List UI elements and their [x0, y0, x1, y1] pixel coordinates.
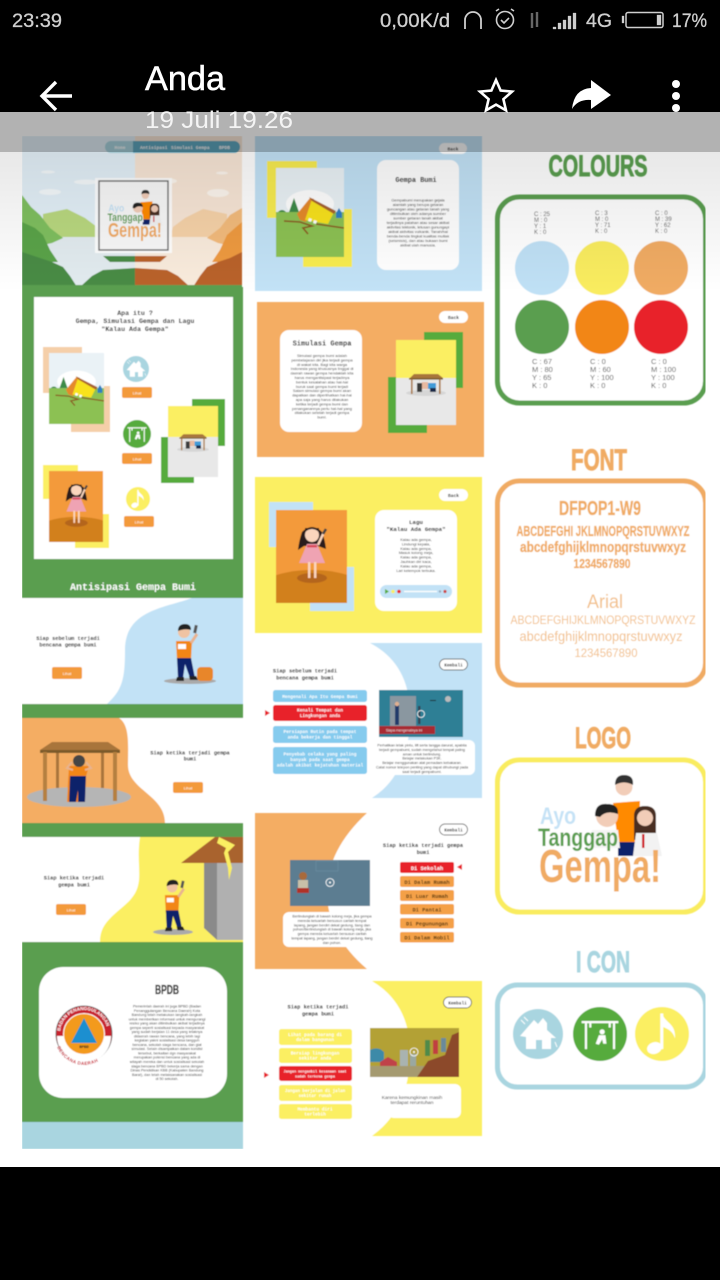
text card: pembelajaran diri jika terjadi gempa	[291, 357, 354, 362]
caption: pohon/Berlindunglah di bawah kolong meja, jika	[293, 928, 372, 932]
button: Lihat	[135, 520, 144, 524]
panel: colours: M : 100	[651, 365, 676, 374]
slide: Siap sebelum terjadi: Siap sebelum terjadi	[273, 668, 337, 674]
text card	[377, 160, 459, 270]
video thumbnail: Siapa mengenalnya ini	[386, 728, 422, 732]
font sample: Arial: 1234567890	[574, 646, 638, 660]
logo card: Ayo	[108, 202, 125, 214]
text card: daerah rawan gempa hendaklah kita	[291, 371, 354, 376]
slide: Siap ketika (sekolah): Siap ketika terjadi gempa	[383, 843, 464, 849]
image	[388, 332, 463, 433]
slide: Siap ketika (sekolah): bumi	[417, 850, 429, 856]
panel: siap ketika (table)	[22, 718, 243, 837]
heading: font: FONT	[571, 444, 627, 477]
font sample: DFPOP: DFPOP1-W9	[559, 498, 641, 520]
text card: ketika terjadi gempa bumi dan	[296, 401, 348, 406]
text card: guncangan atau gelaran tanah yang	[387, 206, 449, 212]
menu list: banyak pada saat gempa	[290, 757, 350, 763]
button	[56, 904, 86, 915]
back button	[439, 143, 467, 154]
caption: terjadi gempabumi, sudah mengetahui tempat paling	[379, 748, 465, 752]
caption: dan pohon.	[323, 941, 341, 945]
BPDB body text: tersebut, berkaitan dgn masyarakat	[138, 1051, 196, 1055]
panel: siap sebelum: Siap sebelum terjadi	[36, 636, 100, 642]
icon: table	[573, 1007, 627, 1061]
mountains right	[135, 208, 242, 287]
button: Lihat	[133, 456, 142, 462]
heading: colours: COLOURS	[548, 150, 648, 183]
text card: bentuk kesalahan atau hal-hal	[296, 379, 348, 384]
kembali button	[440, 659, 468, 670]
font sample: Arial: Arial	[587, 592, 623, 613]
menu list: Lihat pada barang di	[288, 1032, 342, 1038]
video thumbnail	[290, 860, 370, 906]
logo artwork: Ayo	[540, 803, 576, 830]
nav bar: Simulasi Gempa	[171, 145, 210, 151]
caption: lapang, jangan berdiri dekat gedung, tiang dan	[294, 923, 370, 927]
slide: Lagu	[250, 477, 482, 633]
menu list: anda bekerja dan tinggal	[288, 734, 353, 740]
CMYK values: K : 0	[534, 230, 547, 236]
BPDB body text: wilayah mereka dan untuk sosialisasi sekolah	[130, 1060, 204, 1064]
caption: mereda keluarlah bersusun carilah tempat	[298, 919, 366, 923]
menu list: sekitar anda	[299, 1056, 332, 1062]
CMYK values: M : 39	[655, 217, 672, 223]
arrow marker	[264, 1072, 269, 1078]
icon: alarm	[496, 9, 514, 28]
BPDB body text: Penanggulangan Bencana Daerah) Kota	[134, 1009, 201, 1013]
arrow marker	[457, 864, 462, 870]
button: Lihat	[67, 908, 76, 912]
menu heading: Apa itu ?	[117, 310, 153, 317]
CMYK values: C : 25	[534, 212, 551, 218]
menu list: Penyebab celaka yang paling	[284, 752, 357, 758]
menu heading: "Kalau Ada Gempa"	[101, 326, 169, 333]
BPDB body text: resiko yang akan ditimbulkan akibat terjadinya	[129, 1022, 206, 1026]
back button: Back	[447, 146, 459, 152]
panel: BPDB	[22, 941, 244, 1149]
menu heading: Gempa, Simulasi Gempa dan Lagu	[76, 318, 194, 325]
lyric card: Lindungi kepala,	[402, 541, 430, 546]
icon: star	[480, 80, 512, 110]
slide: Siap sebelum terjadi	[255, 643, 482, 798]
panel: icon	[498, 985, 706, 1087]
panel: siap ketika (house)	[22, 837, 243, 942]
font sample: Arial: ABCDEFGHIJKLMNOPQRSTUVWXYZ	[510, 613, 696, 627]
button	[124, 516, 154, 527]
logo card	[95, 178, 172, 253]
text card: Salam simulasi gempa bumi akan	[293, 388, 351, 393]
font sample: DFPOP: 1234567890	[574, 556, 630, 571]
caption: Belajar menggunakan alat pemadam kebakaran.	[382, 761, 462, 765]
panel: siap ketika (house): gempa bumi	[58, 882, 90, 888]
slide: Siap ketika (pantai)	[255, 981, 482, 1136]
font sample: Arial	[510, 592, 696, 660]
slide: Siap ketika (pantai): Siap ketika terjadi	[288, 1004, 348, 1010]
kembali button	[444, 997, 472, 1008]
lyric card: Kalau ada gempa,	[400, 537, 432, 542]
toolbar: title: Anda	[145, 60, 225, 98]
CMYK values: M : 0	[595, 217, 609, 223]
BPDB body text: Barat), dan telah melaksanakan sosialisasi	[132, 1073, 202, 1077]
lyric card: Jauhkan diri kaca,	[400, 559, 432, 564]
caption: saat terjadi gempabumi.	[402, 770, 442, 774]
icon: more	[672, 80, 680, 112]
logo artwork: Tanggap	[538, 824, 618, 852]
button	[52, 667, 82, 679]
panel: siap ketika (table): bumi	[184, 756, 196, 762]
button	[173, 782, 203, 793]
CMYK values	[534, 211, 672, 236]
text card: apa saja yang harus dilakukan	[296, 397, 348, 402]
kembali button: Kembali	[448, 1002, 467, 1006]
text card: Indonesia yang khususnya tinggal di	[291, 366, 353, 371]
menu list: Membantu diri	[297, 1106, 333, 1112]
menu list: Kenali Tempat dan	[297, 708, 343, 714]
BPBD logo: BADAN PENANGGULANGAN	[56, 1006, 110, 1032]
button: Lihat	[63, 671, 72, 676]
mountains left	[22, 195, 135, 287]
arrow marker	[265, 710, 270, 716]
heading: logo: LOGO	[575, 722, 631, 755]
lyric card: "Kalau Ada Gempa"	[386, 526, 446, 533]
lyric card	[375, 510, 457, 611]
icon: battery	[622, 12, 663, 28]
text card: Gempa Bumi	[395, 177, 437, 185]
panel: siap sebelum	[22, 598, 243, 718]
thumbnail: simulasi	[161, 399, 225, 483]
text card: Gempabumi merupakan gejala	[391, 198, 445, 202]
BPDB body text: untuk memberikan informasi untuk mengurangi	[129, 1017, 206, 1021]
menu list: Di Pantai	[412, 908, 442, 914]
panel: colours: Y : 65	[532, 373, 551, 382]
button	[122, 453, 152, 464]
text card: sumber getaran tanah akibat	[393, 216, 444, 220]
lyric card: Kalau ada gempa,	[400, 546, 432, 551]
logo artwork: Gempa!	[539, 840, 661, 892]
menu list: sekitar rumah	[299, 1094, 332, 1099]
panel: colours: K : 0	[590, 381, 605, 390]
status bar: 23:39	[12, 11, 62, 32]
caption: Belajar melakukan P3K.	[402, 757, 442, 761]
menu list: sudah terkena gempa	[295, 1074, 336, 1080]
lyric card: Lari kelempok terbuka.	[396, 568, 436, 573]
status bar	[12, 9, 707, 32]
menu list: Di Sekolah	[411, 866, 443, 872]
menu list: terlebih	[304, 1112, 326, 1118]
text card: akibat aktivitas vulkanik. Tanah/hal	[388, 229, 448, 234]
toolbar: date: 19 Juli 19.26	[145, 107, 293, 134]
panel: colours: M : 60	[590, 365, 611, 374]
translucent toolbar band	[0, 112, 720, 152]
slide: Gempa Bumi	[255, 136, 482, 291]
video thumbnail	[370, 1028, 459, 1077]
text card: di wakat kita. Bagi kita warga	[297, 362, 348, 367]
audio player	[380, 585, 452, 598]
text card: Simulasi Gempa	[293, 340, 352, 348]
icon: signal	[553, 13, 576, 29]
BPDB body text: bencana, sekolah siaga bencana, dan giat	[132, 1043, 202, 1047]
menu list: Persiapan Rutin pada tempat	[284, 729, 357, 735]
lyric card: Kalau ada gempa,	[400, 563, 432, 568]
icon: share	[572, 80, 611, 109]
menu list: adalah akibat kejatuhan material	[277, 762, 364, 768]
caption: Berlindunglah di bawah kolong meja, jika gempa	[292, 914, 373, 918]
kembali button: Kembali	[444, 664, 463, 668]
panel: colours: K : 0	[532, 381, 547, 390]
icon: house	[513, 1009, 563, 1059]
nav bar: Antisipasi	[140, 145, 168, 151]
screenshot collage	[22, 136, 706, 1149]
BPDB body text: gempa seperti sosialisasi kepada masyarakat	[130, 1026, 204, 1030]
back button: Back	[448, 493, 459, 499]
kembali button	[440, 824, 468, 835]
icon: headphones	[465, 12, 481, 29]
button: Lihat	[133, 390, 142, 396]
BPDB body text: yang sudah berjalan 11 desa yang letaknya	[132, 1030, 203, 1034]
section title: Antisipasi Gempa Bumi	[70, 582, 196, 594]
menu list	[279, 1029, 352, 1119]
nav bar: Home	[114, 145, 126, 151]
BPDB body text: Bandung telah melakukan langkah-langkah	[132, 1013, 202, 1017]
panel: colours: C : 67	[532, 357, 552, 366]
menu list	[273, 690, 367, 774]
menu list: Di Dalam Mobil	[404, 936, 450, 942]
BPDB body text: didaerah rawan bencana, yang lebih lagi	[134, 1034, 200, 1038]
logo artwork	[538, 775, 662, 892]
panel: colours: K : 0	[651, 381, 666, 390]
panel: logo	[498, 760, 706, 912]
BPDB body text: kegiatan yakni sosialisasi desa tangguh	[135, 1039, 199, 1043]
menu list: Bersiap lingkungan	[291, 1050, 340, 1056]
CMYK values: C : 0	[655, 211, 668, 217]
BPDB body text: Dinas Pendidikan KBB (Kabupaten Bandung	[131, 1069, 203, 1073]
icon: music note	[635, 1007, 689, 1061]
text card: benda-benda tingkat kualitas mutlak	[387, 234, 449, 238]
text card: terjadinya patahan atau sesar akibat	[387, 220, 450, 225]
lyric card: Kalau ada gempa,	[400, 555, 432, 560]
character with bag	[164, 624, 216, 684]
BPDB body text: di 50 sekolah.	[156, 1077, 178, 1081]
caption: aman untuk berlindung.	[403, 752, 441, 756]
BPDB body text: simulasi. Selain disampaikan dalam kondisi	[132, 1047, 203, 1051]
panel: colours: Y : 100	[651, 373, 675, 382]
kembali button: Kembali	[444, 828, 463, 834]
swatches	[515, 241, 688, 354]
back button	[439, 311, 468, 323]
CMYK values: Y : 62	[655, 223, 671, 229]
nav bar	[105, 141, 240, 153]
text card: ditimbulkan oleh adanya sumber	[390, 211, 447, 216]
panel: siap sebelum: bencana gempa bumi	[39, 643, 97, 649]
caption: Perhatikan letak pintu, lift serta tangga darurat, apabila	[377, 744, 468, 748]
text card	[280, 330, 362, 432]
text card: buruk saat gempa bumi terjadi	[296, 384, 348, 389]
caption	[372, 740, 475, 775]
slide: Simulasi Gempa	[257, 302, 484, 457]
lyric card: Lagu	[409, 519, 423, 526]
text card: dilakukan setelah terjadi gempa	[295, 410, 350, 415]
BPBD logo: BENCANA DAERAH	[56, 1046, 98, 1066]
menu list: Di Pegunungan	[406, 922, 448, 928]
panel: hero title slide	[22, 136, 242, 287]
icon: table	[123, 420, 151, 448]
text card: penanganannya perlu hal-hal yang	[292, 406, 352, 411]
menu list: Mengenali Apa Itu Gempa Bumi	[282, 694, 358, 700]
panel: colours: C : 0	[590, 357, 606, 366]
menu list	[400, 862, 454, 942]
BPDB body text: Pemerintah daerah ini juga BPBD (Badan	[133, 1004, 201, 1008]
back button: Back	[448, 315, 459, 321]
icon: music note	[126, 487, 150, 511]
font sample: Arial: abcdefghijklmnopqrstuvwxyz	[520, 628, 682, 644]
status bar: 4G	[586, 11, 612, 32]
table with crouching man	[40, 742, 120, 802]
video thumbnail	[379, 690, 463, 737]
caption	[283, 912, 377, 947]
icon: data arrows	[532, 12, 537, 28]
status bar: 0,00K/d	[380, 11, 450, 32]
lyric card: Masuk kolong meja,	[399, 550, 433, 555]
panel: siap ketika (house): Siap ketika terjadi	[44, 876, 104, 882]
font sample: DFPOP	[516, 498, 690, 571]
panel: font	[498, 481, 706, 685]
caption: Catat nomor telepon penting yang dapat dihubungi pada	[376, 766, 469, 770]
CMYK values: Y : 71	[595, 223, 611, 229]
button	[122, 387, 152, 398]
status bar: 17%	[672, 11, 707, 32]
text card: bumi.	[317, 415, 327, 420]
panel: BPDB: BPDB	[155, 982, 179, 997]
panel: siap ketika (table): Siap ketika terjadi gempa	[150, 750, 231, 756]
caption: terdapat reruntuhan	[391, 1100, 434, 1106]
fade overlay	[0, 152, 720, 292]
menu list: dalam bangunan	[296, 1037, 334, 1043]
text card: aktivitas tektonik, letusan gunungapi	[387, 224, 449, 230]
panel: colours: M : 80	[532, 365, 553, 374]
thumbnail: gempa	[43, 347, 110, 432]
button: Lihat	[184, 786, 193, 790]
text card: (seismisis), dan atau bukaan bumi	[388, 238, 448, 243]
character	[153, 880, 193, 935]
panel: colours	[498, 197, 706, 403]
logo card: Tanggap	[108, 212, 143, 224]
thumbnail: lagu	[29, 465, 124, 560]
icon: house	[123, 356, 149, 382]
CMYK values: K : 0	[595, 229, 608, 235]
CMYK values: M : 0	[534, 218, 548, 224]
menu list: Di Luar Rumah	[406, 894, 448, 900]
toolbar: back arrow	[42, 82, 72, 110]
BPDB body text: merupakan potensi bencana yang ada di	[134, 1056, 200, 1060]
panel: Apa itu menu	[22, 287, 243, 598]
slide: Siap sebelum terjadi: bencana gempa bumi	[276, 675, 334, 681]
collapsed house	[181, 837, 243, 940]
text card: harus mengantisipasi terjadinya	[295, 375, 350, 380]
text card: akibat ulah manusia.	[400, 242, 436, 248]
CMYK values: C : 3	[595, 211, 608, 217]
menu list: Lingkungan anda	[300, 713, 341, 719]
back button	[439, 489, 468, 501]
text card: Simulasi gempa bumi adalah	[297, 353, 347, 358]
menu list: Di Dalam Rumah	[404, 880, 450, 886]
caption: tempat lapang, jangan berdiri dekat gedung, tiang	[291, 936, 373, 940]
BPDB body text: siaga bencana BPBD bekerja sama dengan	[131, 1064, 203, 1068]
caption: gempa mereda keluarlah bersusun carilah	[298, 932, 366, 936]
menu list: Jangan berjalan di jalan	[285, 1089, 346, 1094]
text card: dapatkan dan diperlihatkan hal-hal	[292, 393, 352, 398]
CMYK values: Y : 1	[534, 224, 547, 230]
slide: Siap ketika (pantai): gempa bumi	[302, 1011, 334, 1017]
caption: Karena kemungkinan masih	[382, 1095, 443, 1101]
slide: Siap ketika (sekolah)	[255, 813, 482, 969]
menu list: Jangan mengambil kesamaan saat	[283, 1070, 347, 1074]
panel: colours: Y : 100	[590, 373, 614, 382]
nav bar: BPDB	[219, 145, 230, 151]
BPBD logo	[55, 1005, 113, 1066]
BPBD logo: BPBD	[79, 1046, 89, 1050]
CMYK values: K : 0	[655, 229, 668, 235]
caption	[382, 1084, 461, 1118]
text card: alamiah yang berupa getaran	[393, 202, 443, 207]
panel: colours: C : 0	[651, 357, 667, 366]
logo card: Gempa!	[108, 220, 162, 242]
heading: icon: I CON	[576, 946, 630, 979]
